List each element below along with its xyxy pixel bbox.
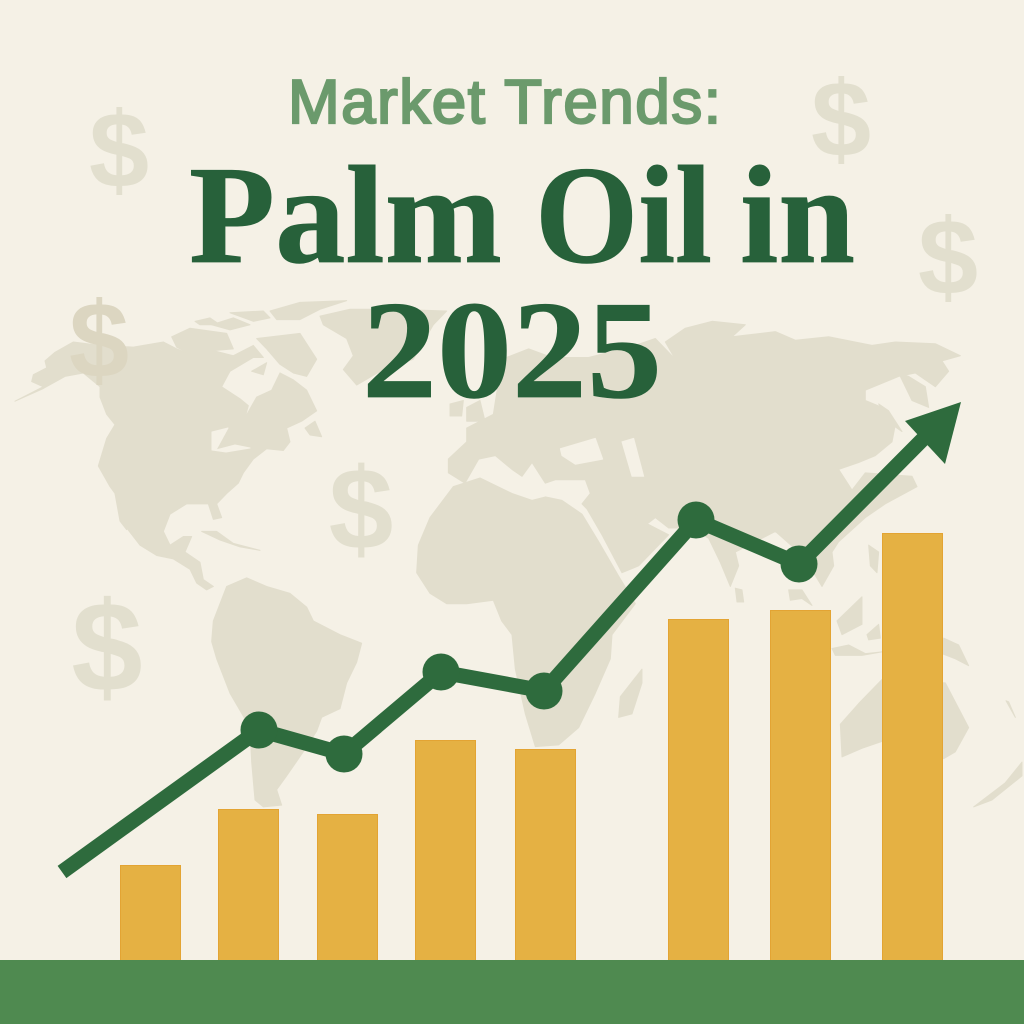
Newfoundland — [305, 421, 322, 437]
bar 6 — [668, 620, 728, 960]
bar 2 — [218, 810, 278, 960]
bottom band — [0, 960, 1024, 1024]
Great Lakes — [212, 428, 250, 452]
Madagascar — [619, 669, 642, 717]
title line 1: in — [740, 138, 855, 293]
trend line — [62, 432, 930, 872]
subtitle: Market Trends: — [288, 68, 721, 137]
bar 1 — [120, 866, 180, 960]
bar 7 — [770, 610, 830, 960]
Baja California — [115, 493, 127, 530]
Indonesia and Philippines — [832, 545, 882, 655]
bar 3 — [318, 814, 378, 960]
dollar sign 3: $ — [918, 196, 978, 317]
dollar sign 2: $ — [811, 58, 871, 179]
trend line with arrow — [62, 402, 961, 872]
title line 1: Oil — [535, 138, 712, 293]
title — [189, 138, 855, 428]
North America — [15, 342, 317, 590]
dollar sign 5: $ — [329, 444, 393, 574]
Australia — [840, 679, 969, 759]
title line 1 — [189, 138, 855, 293]
bar 8 — [882, 534, 942, 960]
South America — [212, 578, 362, 807]
Cuba — [202, 531, 260, 550]
New Guinea — [942, 638, 969, 666]
data points — [240, 502, 818, 772]
bar 4 — [416, 740, 476, 960]
eastern hemisphere — [417, 321, 1022, 807]
Greenland — [320, 309, 447, 385]
New Zealand — [974, 701, 1022, 807]
world map background — [15, 301, 1022, 807]
Eurasia — [448, 321, 960, 586]
bar 5 — [516, 750, 576, 960]
western hemisphere — [15, 301, 485, 807]
inland seas — [560, 438, 644, 476]
Iceland and Britain — [450, 401, 485, 421]
dollar sign 4: $ — [69, 279, 129, 400]
title line 1: Palm — [189, 138, 502, 293]
dollar signs — [69, 58, 978, 719]
title line 2: 2025 — [362, 273, 662, 428]
dollar sign 6: $ — [71, 576, 143, 719]
Sri Lanka — [735, 588, 744, 602]
dollar sign 1: $ — [89, 89, 149, 210]
Japan and Sakhalin — [879, 373, 929, 432]
Malay peninsula — [789, 590, 812, 605]
bar chart — [120, 534, 942, 960]
Arctic islands — [172, 328, 233, 354]
Africa — [417, 478, 635, 747]
arrow head — [905, 402, 961, 464]
